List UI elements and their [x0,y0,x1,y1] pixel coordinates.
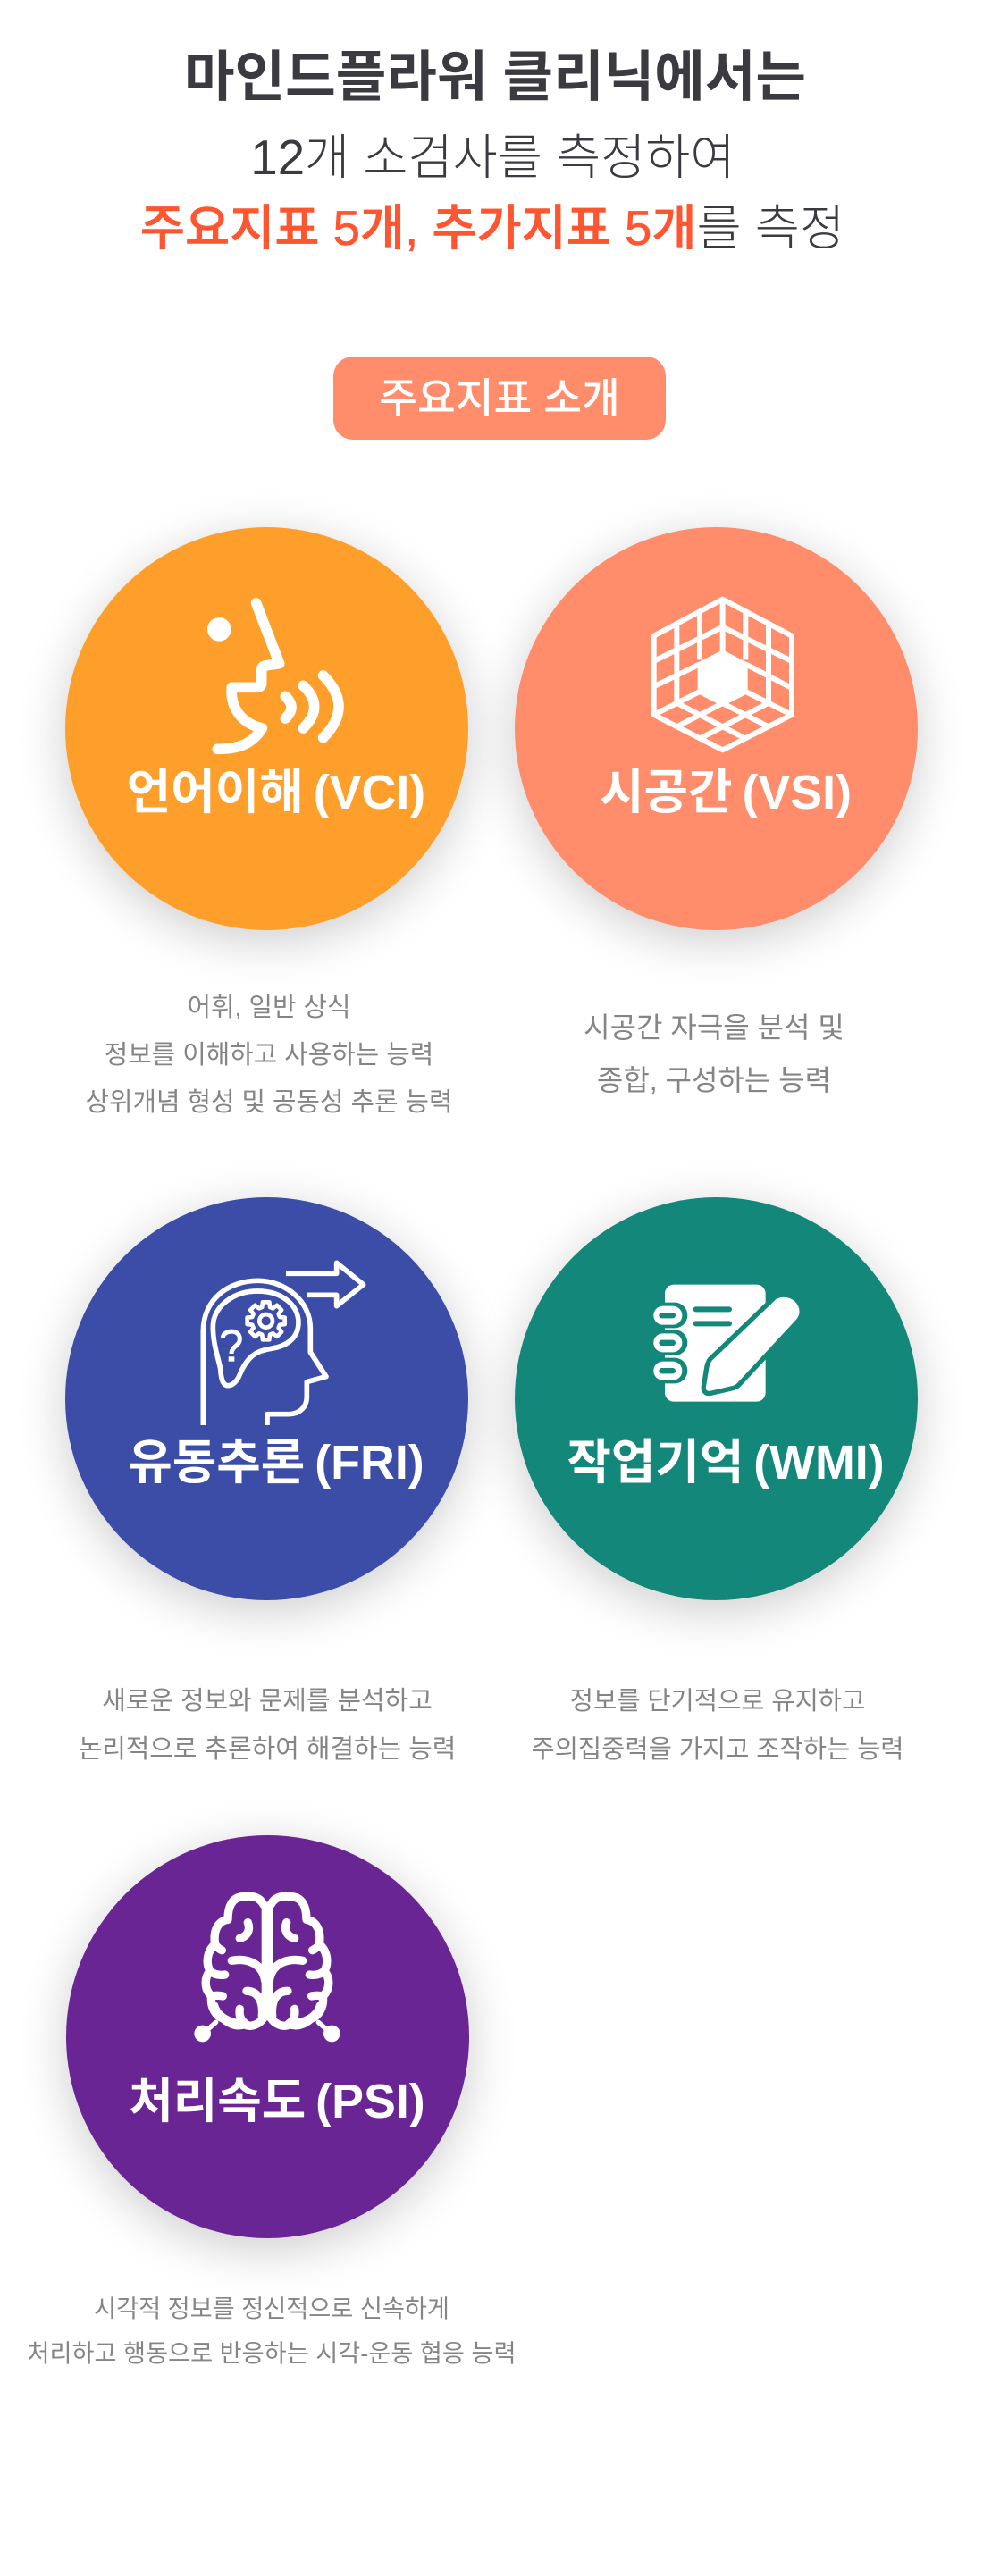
text: FRI description [79,1687,456,1764]
panel: WMI circle [515,1197,918,1600]
panel: VSI circle [515,527,918,930]
panel: VCI circle [65,527,468,930]
text: WMI description: 주의집중력을 가지고 조작하는 능력 [531,1735,904,1764]
text: VSI description: 시공간 자극을 분석 및 [584,1011,844,1044]
text: PSI description [27,2295,517,2367]
title: 마인드플라워 클리닉에서는 [184,46,806,108]
label: VSI: 시공간 (VSI) [600,766,852,819]
icon: 3D grid cube [651,597,794,752]
label: WMI: 작업기억 (WMI) [567,1436,885,1489]
text: VSI description: 종합, 구성하는 능력 [597,1064,831,1096]
text: VCI description [86,994,452,1117]
icon: speaking face [207,598,344,754]
label: FRI: 유동추론 (FRI) [128,1436,424,1489]
text: WMI description: 정보를 단기적으로 유지하고 [570,1687,865,1716]
section badge: 주요지표 소개 [379,375,620,422]
icon: head with gear and arrow [200,1260,366,1425]
icon: brain [194,1892,340,2043]
label: PSI: 처리속도 (PSI) [129,2075,425,2128]
text: PSI description: 처리하고 행동으로 반응하는 시각-운동 협응 능력 [27,2339,517,2367]
text: VCI description: 상위개념 형성 및 공동성 추론 능력 [86,1088,452,1117]
panel: PSI circle [66,1835,469,2238]
highlighted subtitle line: 주요지표 5개, 추가지표 5개를 측정 [140,201,844,256]
icon: notebook and pencil [653,1285,800,1402]
text: FRI description: 새로운 정보와 문제를 분석하고 [102,1687,433,1716]
panel: FRI circle [65,1197,468,1600]
text: VSI description [584,1011,844,1096]
label: VCI: 언어이해 (VCI) [127,766,425,819]
text: VCI description: 어휘, 일반 상식 [188,994,350,1022]
text: FRI description: 논리적으로 추론하여 해결하는 능력 [79,1735,456,1764]
text: VCI description: 정보를 이해하고 사용하는 능력 [105,1041,433,1070]
subtitle line: 12개 소검사를 측정하여 [250,130,735,185]
text: PSI description: 시각적 정보를 정신적으로 신속하게 [94,2295,449,2322]
section badge [333,357,666,440]
text: WMI description [531,1687,904,1764]
